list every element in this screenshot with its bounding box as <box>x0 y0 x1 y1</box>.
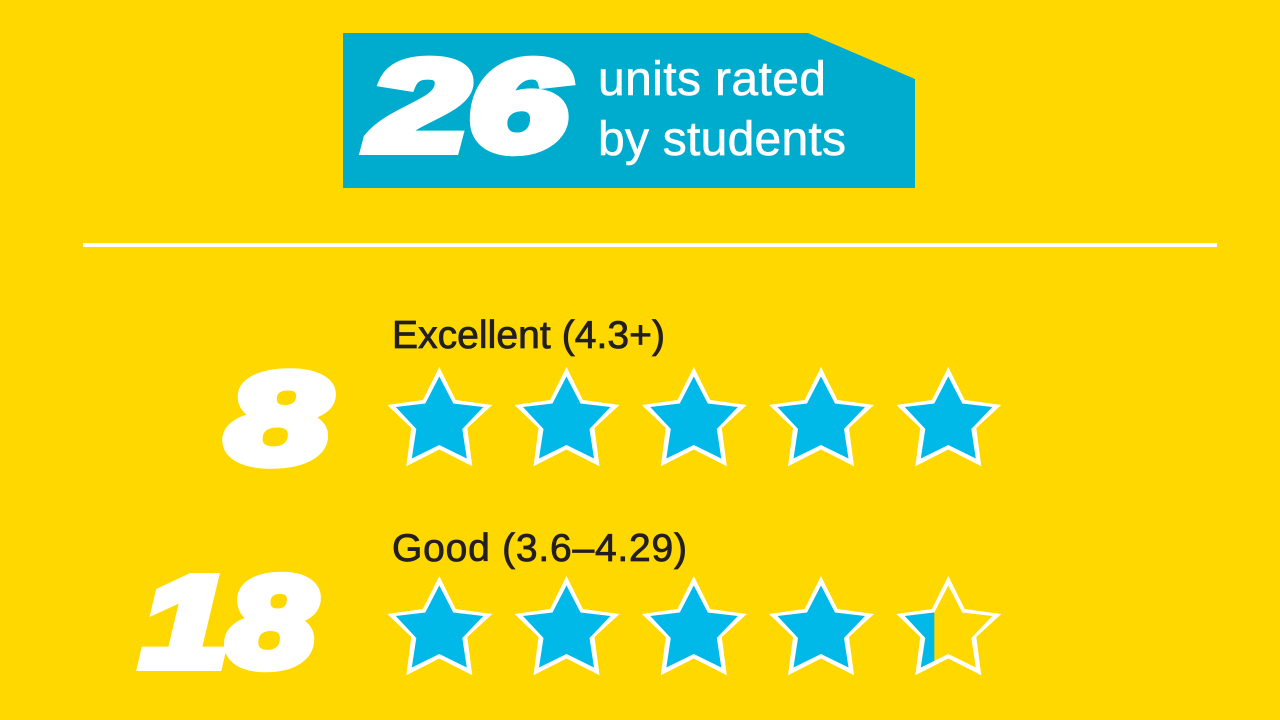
banner panel <box>343 33 915 188</box>
big number 26: 26 <box>367 35 568 178</box>
number 8: 8 <box>227 348 329 490</box>
banner text: units rated <box>598 53 826 106</box>
five full stars <box>387 367 1001 466</box>
banner text <box>598 53 846 166</box>
row: good <box>136 532 1002 676</box>
banner text: by students <box>598 113 846 166</box>
banner: 26 units rated by students <box>343 33 915 188</box>
number 18: 18 <box>141 551 315 694</box>
label: excellent: Excellent (4.3+) <box>392 314 665 357</box>
four and a fraction stars <box>387 576 1001 675</box>
row: excellent <box>227 314 1001 490</box>
label: good: Good (3.6–4.29) <box>392 527 687 570</box>
